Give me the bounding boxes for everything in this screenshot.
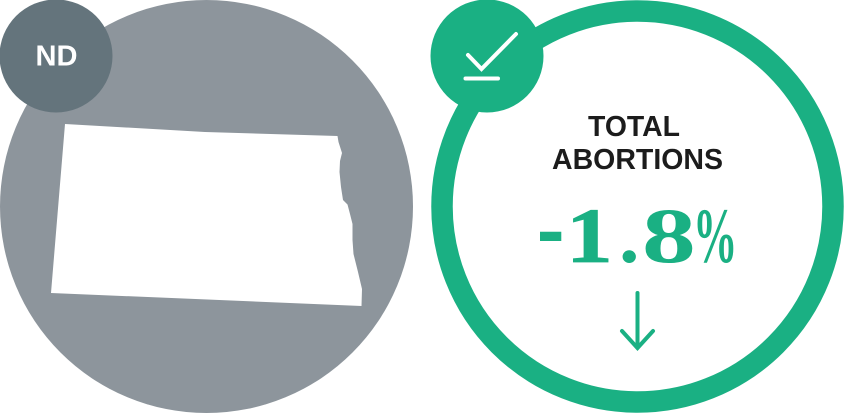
value: % [693, 192, 737, 279]
heading [552, 111, 723, 176]
heading: TOTAL [588, 111, 680, 143]
check badge [430, 0, 544, 112]
state badge: ND [36, 40, 78, 72]
value: . [619, 194, 639, 280]
value: 1 [566, 192, 613, 279]
state map: North Dakota [51, 124, 362, 306]
heading: ABORTIONS [552, 144, 723, 176]
value: 8 [642, 193, 696, 279]
panel: state [0, 0, 413, 413]
green ring [442, 11, 833, 402]
value: - [537, 165, 564, 286]
state badge [0, 0, 112, 112]
gray state circle [0, 0, 413, 413]
value [537, 165, 737, 286]
icon: down arrow [622, 293, 653, 348]
panel: total abortions [430, 0, 833, 402]
